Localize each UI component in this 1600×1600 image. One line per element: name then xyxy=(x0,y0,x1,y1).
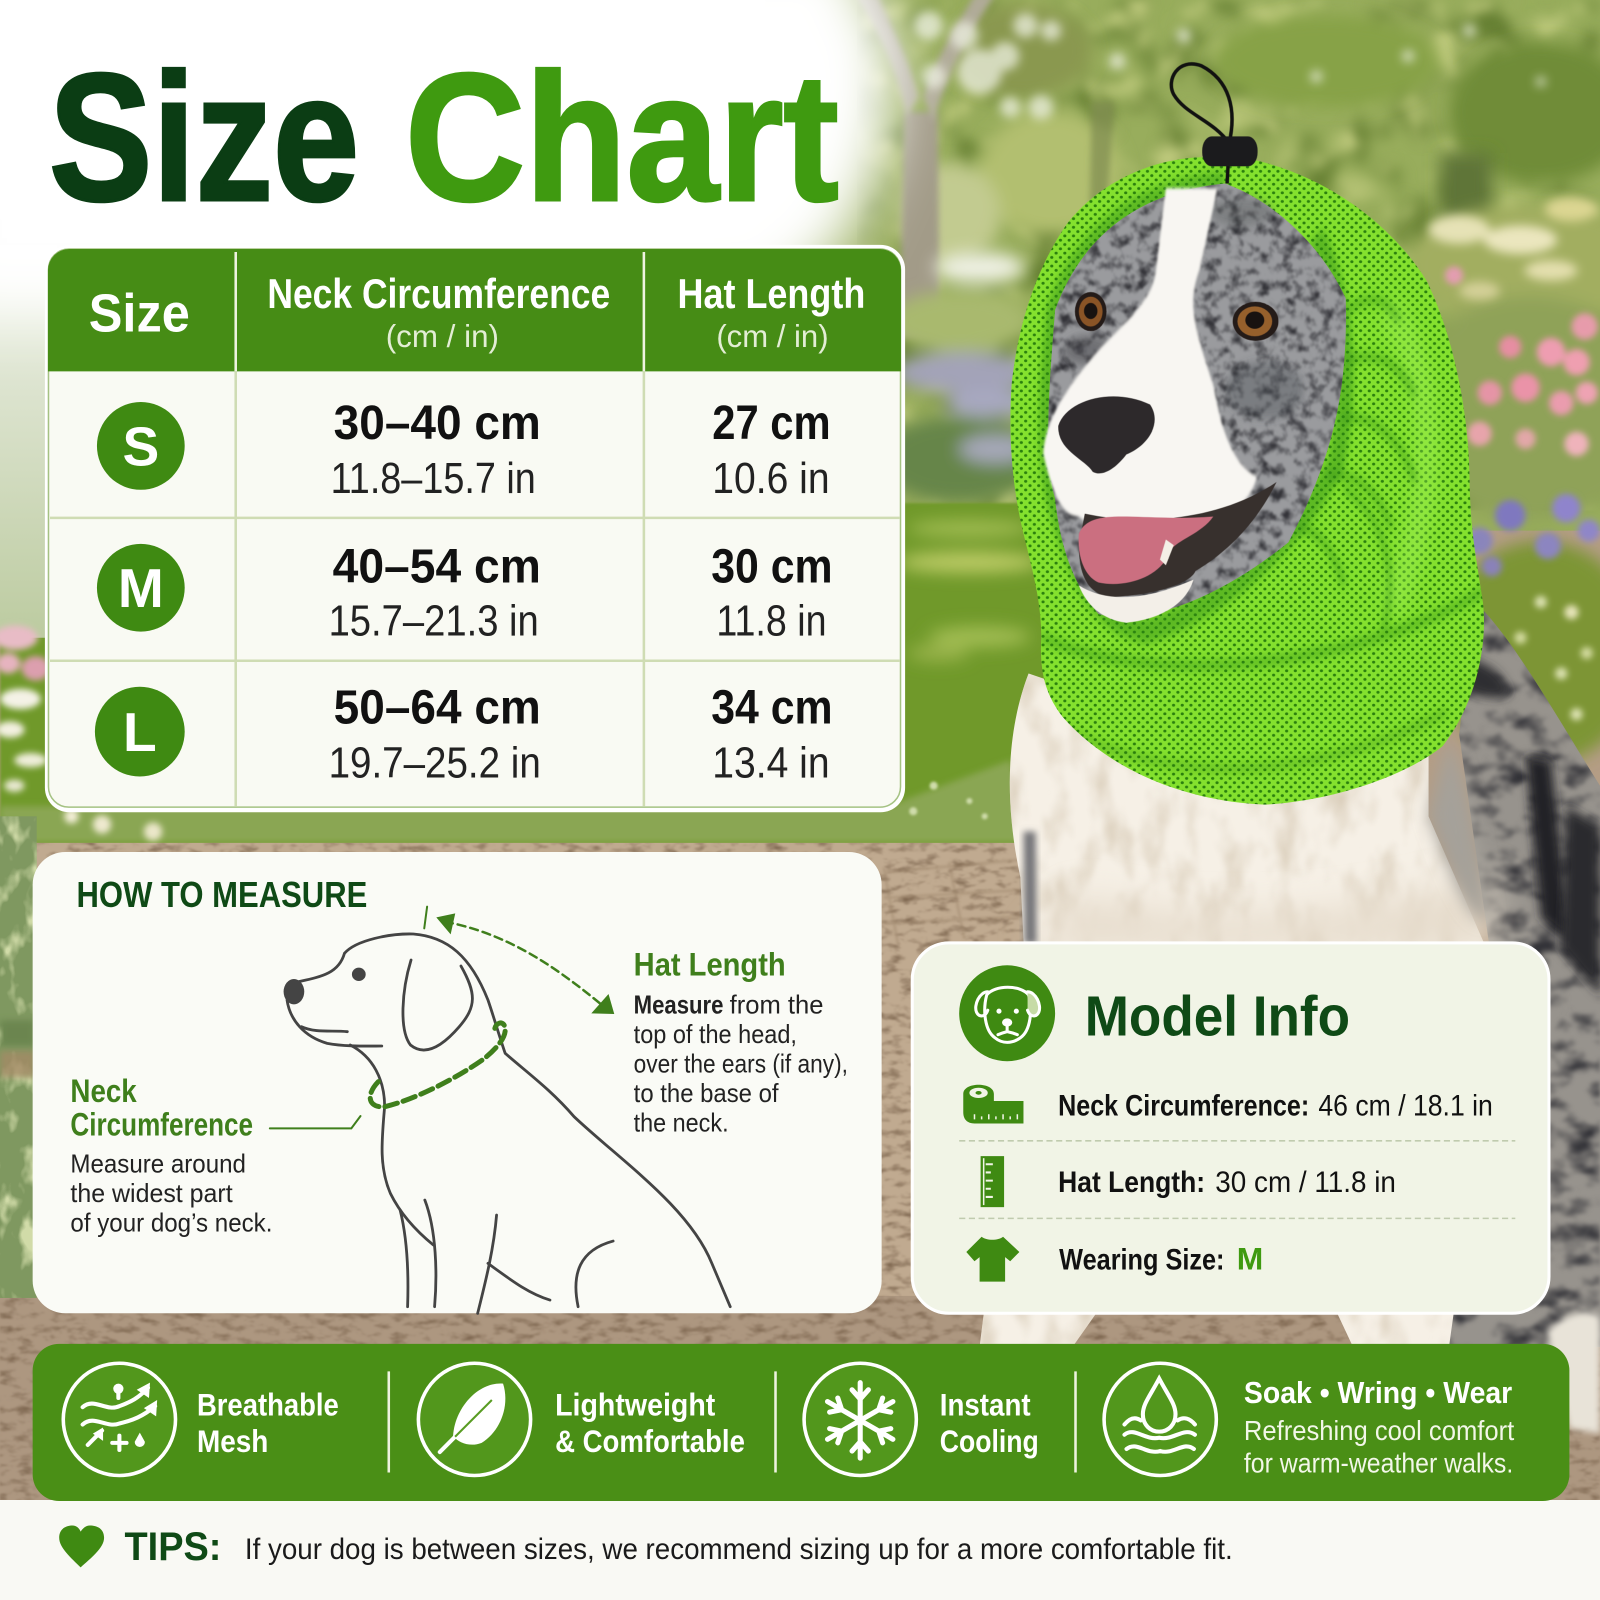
tips xyxy=(59,1525,1233,1569)
row M: 15.7–21.3 in xyxy=(329,597,539,646)
icon: dog face badge xyxy=(959,965,1055,1061)
neck circumference label: Measure around xyxy=(70,1150,246,1178)
panel: how to measure xyxy=(33,852,882,1313)
tips: If your dog is between sizes, we recommend sizing up for a more comfortable fit. xyxy=(245,1533,1233,1566)
table header row: Hat Length xyxy=(678,270,865,317)
grass edge xyxy=(0,760,1031,843)
hat length value: Hat Length: xyxy=(1058,1166,1205,1199)
open mouth xyxy=(1079,482,1277,597)
hat length label: the neck. xyxy=(634,1110,729,1138)
hat length label xyxy=(634,946,848,1138)
distant flower beds xyxy=(878,204,1600,765)
row L: 13.4 in xyxy=(712,739,830,788)
feature: lightweight xyxy=(418,1363,745,1476)
row S: 30–40 cm xyxy=(334,397,541,450)
hat length label: top of the head, xyxy=(634,1021,797,1049)
feature: lightweight: Lightweight xyxy=(555,1386,716,1422)
background flowers xyxy=(0,266,1600,841)
dog photo with lime mesh hood xyxy=(980,64,1600,1434)
dashed neck measure xyxy=(370,1023,505,1107)
how to measure heading: HOW TO MEASURE xyxy=(77,875,367,915)
table header row: Neck Circumference xyxy=(267,270,610,317)
size table xyxy=(45,245,905,812)
row M: 40–54 cm xyxy=(333,541,541,594)
row S: 11.8–15.7 in xyxy=(331,454,536,503)
feature: instant cooling: Instant xyxy=(940,1386,1031,1422)
wearing size value: M xyxy=(1237,1240,1263,1276)
hat length label: Measure xyxy=(634,991,723,1019)
row L xyxy=(95,681,833,788)
neck circumference label: Circumference xyxy=(70,1106,253,1143)
nose xyxy=(1058,396,1155,473)
feature: breathable mesh xyxy=(63,1363,339,1476)
eyes xyxy=(1075,292,1279,341)
feature: lightweight: & Comfortable xyxy=(555,1423,745,1459)
model info heading: Model Info xyxy=(1085,985,1350,1048)
row S xyxy=(97,397,831,503)
feature: soak wring wear: Refreshing cool comfort xyxy=(1244,1415,1515,1446)
neck circumference value xyxy=(1058,1089,1493,1122)
brick path xyxy=(0,843,1600,1510)
row S: 10.6 in xyxy=(712,454,830,503)
hat length dashed arrow xyxy=(436,913,614,1014)
neck circumference value: 46 cm / 18.1 in xyxy=(1318,1089,1493,1122)
top white fog xyxy=(0,0,898,306)
hat length label: from the xyxy=(730,991,823,1019)
icon: ruler xyxy=(981,1156,1004,1207)
hood back mesh xyxy=(1010,157,1484,805)
tree trunk xyxy=(855,0,1114,337)
bottom tips strip background xyxy=(0,1500,1600,1600)
neck circumference label: the widest part xyxy=(70,1180,233,1208)
tree canopy xyxy=(714,0,1600,531)
neck circumference label xyxy=(70,1072,272,1238)
hat length label: over the ears (if any), xyxy=(634,1050,848,1078)
row M: M xyxy=(118,557,164,619)
neck leader line xyxy=(270,1116,361,1128)
feature: soak wring wear xyxy=(1104,1363,1515,1478)
table header row: Size xyxy=(89,284,190,344)
icon: tape measure xyxy=(963,1085,1023,1123)
icon: t-shirt xyxy=(966,1237,1019,1282)
title: Size xyxy=(49,37,359,239)
neck circumference label: of your dog’s neck. xyxy=(70,1210,272,1238)
icon: water drop xyxy=(1104,1363,1216,1476)
dog body fur xyxy=(980,602,1600,1434)
table header row xyxy=(48,249,901,371)
row M xyxy=(97,541,833,646)
drawstring cord and toggle xyxy=(1171,64,1258,184)
neck circumference label: Neck xyxy=(70,1072,137,1109)
hat length tick xyxy=(424,907,427,928)
row M: 11.8 in xyxy=(716,597,827,646)
dog face xyxy=(1048,184,1346,617)
row L: 34 cm xyxy=(711,681,833,734)
hat length label: to the base of xyxy=(634,1080,779,1108)
feature: instant cooling: Cooling xyxy=(940,1423,1039,1459)
row S: 27 cm xyxy=(712,397,831,450)
panel: model info xyxy=(912,943,1549,1313)
features band xyxy=(33,1344,1569,1501)
feature: soak wring wear: Soak • Wring • Wear xyxy=(1244,1376,1512,1410)
feature: breathable mesh: Mesh xyxy=(197,1423,268,1459)
table header row: (cm / in) xyxy=(716,318,829,354)
left fog gradient xyxy=(0,245,57,638)
icon: heart xyxy=(59,1526,104,1567)
white blaze and muzzle xyxy=(1043,188,1257,539)
lawn xyxy=(0,503,1082,850)
hat length label: Hat Length xyxy=(634,946,786,983)
hat length value: 30 cm / 11.8 in xyxy=(1215,1166,1396,1199)
neck circumference value: Neck Circumference: xyxy=(1058,1089,1309,1122)
feature: breathable mesh: Breathable xyxy=(197,1386,339,1422)
hat length value xyxy=(1058,1166,1396,1199)
row S: S xyxy=(122,415,159,477)
row M: 30 cm xyxy=(711,541,833,594)
icon: airflow xyxy=(63,1363,176,1476)
dog outline diagram xyxy=(270,907,730,1313)
row L: 50–64 cm xyxy=(334,681,541,734)
icon: snowflake xyxy=(804,1363,916,1476)
title xyxy=(49,37,839,239)
row L: 19.7–25.2 in xyxy=(329,739,541,788)
feature: instant cooling xyxy=(804,1363,1039,1476)
left plant strip xyxy=(0,816,37,1298)
hood folds xyxy=(1041,184,1484,768)
tips: TIPS: xyxy=(124,1525,221,1569)
icon: feather xyxy=(418,1363,531,1476)
wearing size value: Wearing Size: xyxy=(1059,1243,1224,1276)
row L: L xyxy=(123,701,157,763)
bokeh spots xyxy=(914,11,1546,119)
title: Chart xyxy=(405,37,839,239)
table header row: (cm / in) xyxy=(386,318,499,354)
feature: soak wring wear: for warm-weather walks. xyxy=(1244,1447,1513,1478)
